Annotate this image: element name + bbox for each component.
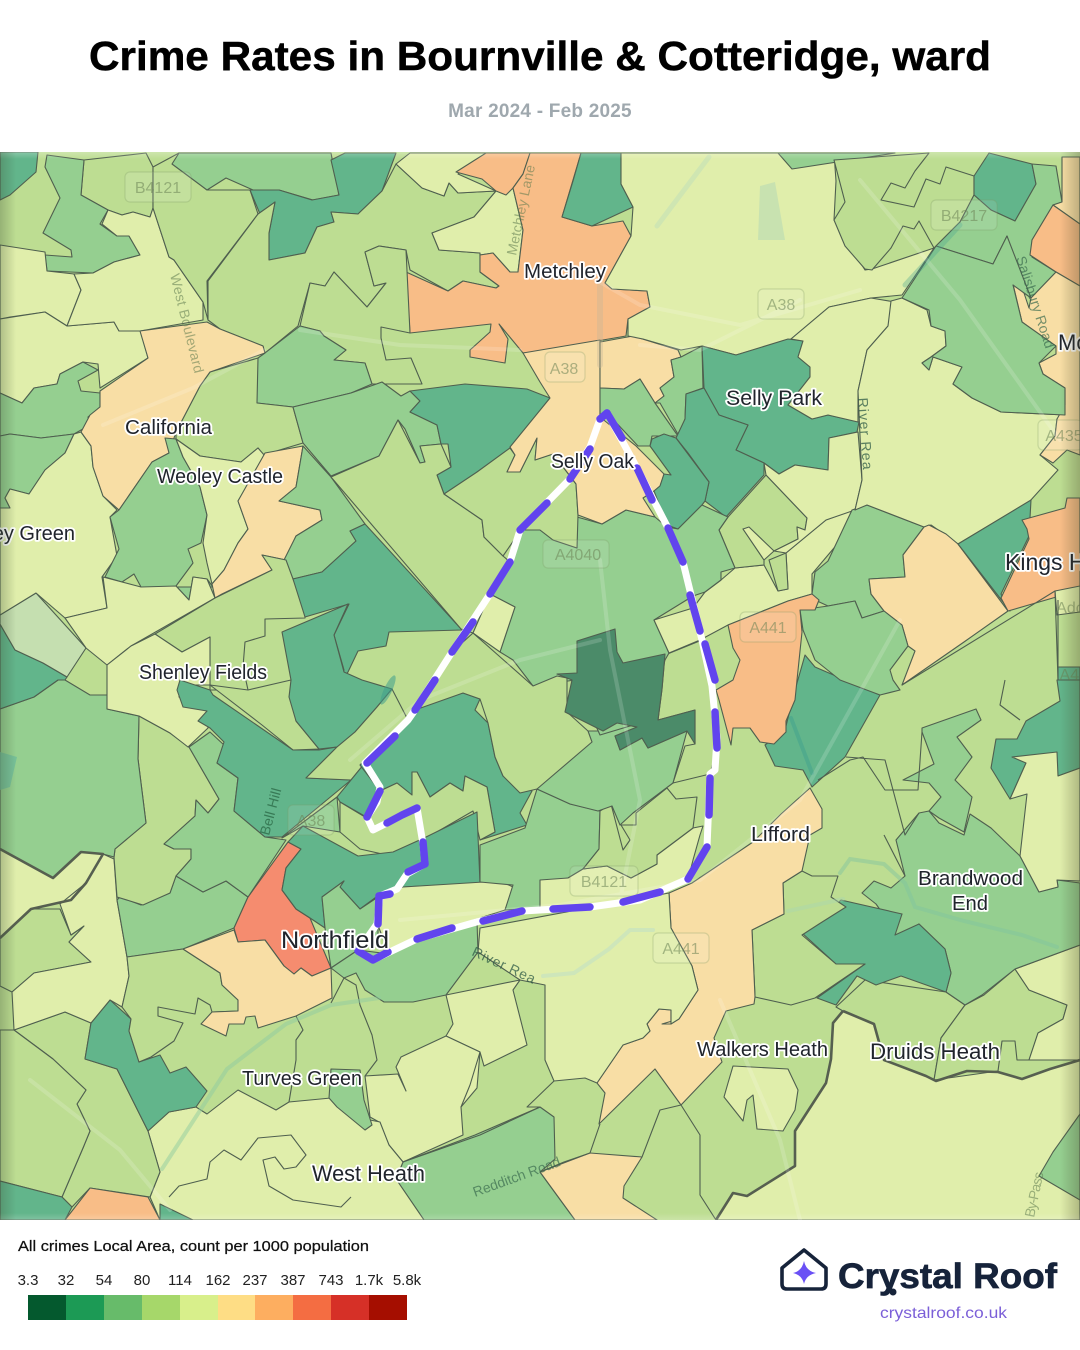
place name labels: Brandwood <box>918 868 1023 890</box>
road number labels: A441 <box>662 941 700 958</box>
legend scale: 32 <box>58 1272 74 1289</box>
place name labels <box>0 261 1080 1186</box>
subtitle: date range: Mar 2024 - Feb 2025 <box>448 101 632 122</box>
area: lowest rate (dark green) <box>557 629 695 750</box>
legend scale: 387 <box>280 1272 306 1289</box>
area: Weoley Castle (peach) <box>212 446 322 598</box>
legend scale: 54 <box>96 1272 112 1289</box>
legend title: All crimes Local Area, count per 1000 population <box>18 1238 369 1255</box>
purple dashes of route <box>358 413 717 960</box>
legend scale: 3.3 <box>18 1272 38 1289</box>
base map layer <box>0 152 1080 1220</box>
place name labels: Weoley Castle <box>157 466 283 488</box>
road name labels: Redditch Road <box>471 1153 562 1200</box>
crime rate areas <box>0 152 1080 1220</box>
area: Kings Heath (orange) <box>1001 498 1080 611</box>
legend <box>18 1238 422 1320</box>
place name labels: Selly Oak <box>551 451 635 473</box>
roads and water <box>0 157 1060 1220</box>
area: Metchley (orange) <box>406 153 650 363</box>
legend scale: 1.7k <box>355 1272 384 1289</box>
website link: crystalroof.co.uk <box>880 1305 1008 1322</box>
legend scale: 743 <box>318 1272 344 1289</box>
place name labels: Shenley Fields <box>139 662 267 684</box>
area: California (peach) <box>81 322 265 510</box>
wordmark: Crystal Roof <box>838 1257 1057 1296</box>
road name labels: Metchley Lane <box>503 163 538 257</box>
road number labels: A441 <box>749 620 787 637</box>
place name labels: Selly Park <box>726 387 823 410</box>
place name labels: Lifford <box>751 824 810 846</box>
road name labels: River Rea <box>470 943 538 987</box>
place name labels: Turves Green <box>242 1068 362 1090</box>
road name labels: West Boulevard <box>167 272 207 375</box>
road number labels: A38 <box>767 297 795 314</box>
place name labels: West Heath <box>312 1161 425 1186</box>
place name labels: Druids Heath <box>870 1039 1000 1064</box>
place name labels: Northfield <box>281 927 389 954</box>
road name labels <box>167 163 1058 1219</box>
road number labels: A38 <box>550 361 578 378</box>
area: Selly Park (green) <box>702 339 859 474</box>
legend scale: 162 <box>205 1272 231 1289</box>
area: east peach <box>869 525 1008 685</box>
legend scale: 80 <box>134 1272 150 1289</box>
logo: Crystal Roof <box>780 1248 1058 1322</box>
legend scale: 5.8k <box>393 1272 422 1289</box>
ward boundary route <box>358 413 717 960</box>
road number labels: A38 <box>297 813 325 830</box>
place name labels: California <box>125 417 213 439</box>
legend scale: 237 <box>242 1272 268 1289</box>
choropleth map <box>0 152 1080 1220</box>
road name labels: By-Pass <box>1021 1170 1046 1219</box>
road number labels <box>125 172 1080 963</box>
road number labels: A4040 <box>555 547 601 564</box>
map edge shading <box>0 152 1080 1220</box>
district border lines <box>169 591 1058 1220</box>
icon: house with star <box>782 1250 826 1289</box>
title: Crime Rates in Bournville & Cotteridge, ward <box>89 33 991 79</box>
road name labels: River Rea <box>855 397 876 470</box>
road name labels: Bell Hill <box>256 786 284 837</box>
place name labels: Metchley <box>524 261 606 283</box>
road number labels: B4121 <box>135 180 181 197</box>
road number labels: B4217 <box>941 208 987 225</box>
place name labels: End <box>952 893 988 915</box>
place name labels: Walkers Heath <box>697 1039 828 1061</box>
area: A441 orange <box>716 594 819 745</box>
road number labels: B4121 <box>581 874 627 891</box>
borough boundary <box>0 849 1080 1220</box>
area: highest rate, Northfield <box>234 842 331 976</box>
road name labels: Salisbury Road <box>1013 254 1058 350</box>
legend scale <box>18 1272 422 1320</box>
legend scale: 114 <box>168 1272 192 1289</box>
area: Selly Oak (peach) <box>507 340 664 524</box>
